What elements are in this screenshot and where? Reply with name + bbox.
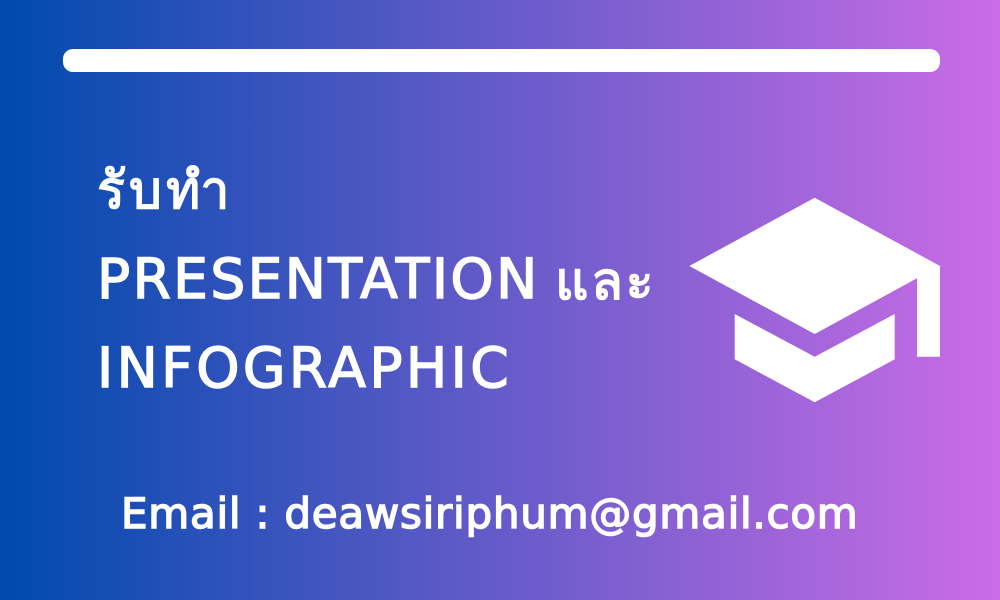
heading: Thai word and: และ — [555, 252, 656, 312]
email text: Email : deawsiriphum@gmail.com — [121, 489, 858, 538]
heading: Thai line: รับทำ — [97, 161, 233, 221]
top white bar — [63, 49, 940, 72]
heading: INFOGRAPHIC line: INFOGRAPHIC — [97, 336, 512, 400]
heading: PRESENTATION: PRESENTATION — [97, 247, 540, 311]
